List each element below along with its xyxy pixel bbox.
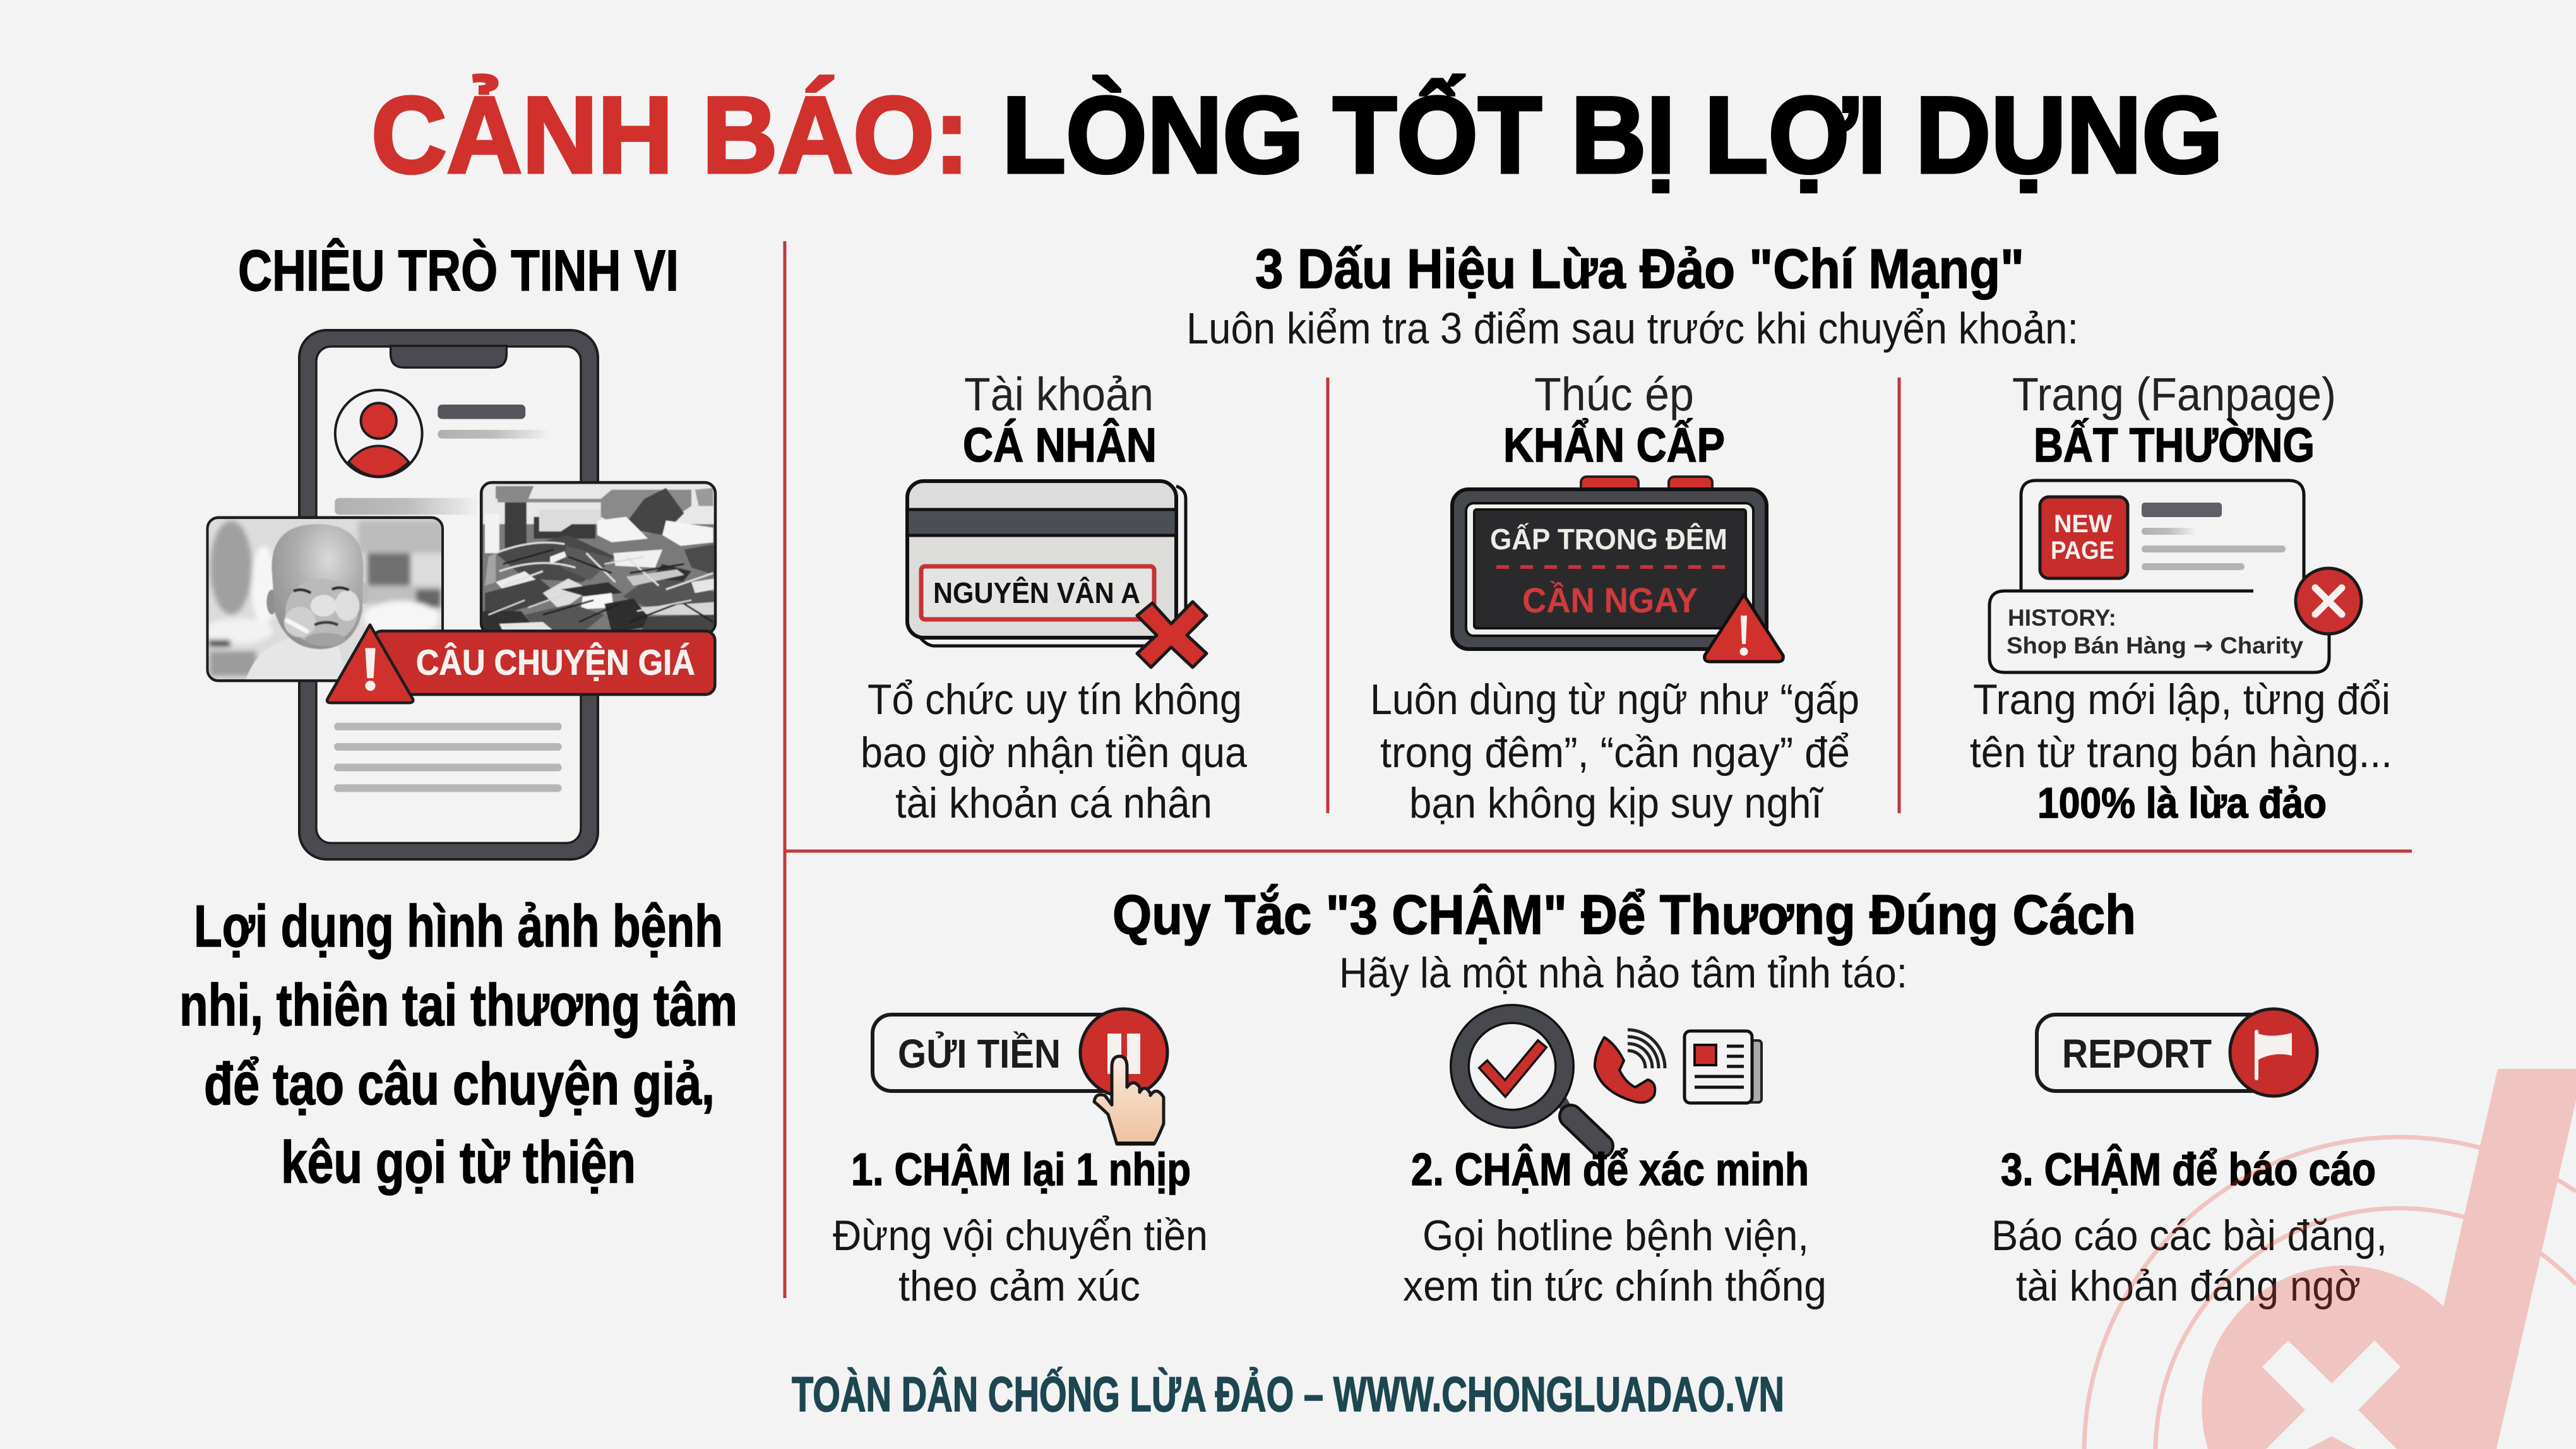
card: tài khoản cá nhân — [861, 368, 1247, 827]
text: step 2 title: 2. CHẬM để xác minh — [1411, 1144, 1809, 1195]
banner: câu chuyện giả: CÂU CHUYỆN GIÁ — [416, 641, 695, 683]
text: urgency description — [1370, 676, 1859, 827]
text: step 2 description: xem tin tức chính thống — [1403, 1262, 1827, 1310]
text: card description: tài khoản cá nhân — [895, 779, 1212, 827]
text: description of the scheme — [179, 893, 737, 1195]
icon: send money button with pause: GỬI TIỀN — [898, 1030, 1061, 1076]
text: card description: Tổ chức uy tín không — [868, 676, 1242, 724]
text: urgency description: trong đêm”, “cần ngay” để — [1380, 729, 1850, 777]
text: urgency description: Luôn dùng từ ngữ như “gấp — [1370, 676, 1859, 724]
step 3: chậm để báo cáo — [1991, 1009, 2387, 1310]
section: 3 dấu hiệu lừa đảo — [861, 237, 2392, 827]
text: card description — [861, 676, 1247, 827]
icon: fanpage history: PAGE — [2051, 537, 2114, 564]
text: step 2 description: Gọi hotline bệnh viện, — [1422, 1212, 1809, 1260]
text: step 1 title: 1. CHẬM lại 1 nhịp — [851, 1144, 1191, 1195]
text: step 3 description — [1991, 1212, 2387, 1310]
icon: fanpage history — [1989, 480, 2361, 672]
card: tài khoản cá nhân: CÁ NHÂN — [963, 418, 1157, 472]
heading: quy tắc 3 chậm: Quy Tắc "3 CHẬM" Để Thương Đúng Cách — [1112, 883, 2136, 946]
heading: 3 dấu hiệu: 3 Dấu Hiệu Lừa Đảo "Chí Mạng" — [1255, 237, 2024, 300]
card: trang bất thường: BẤT THƯỜNG — [2034, 419, 2315, 472]
icon: send money button with pause — [873, 1009, 1167, 1144]
photo: disaster debris — [481, 482, 715, 634]
text: fanpage description — [1970, 676, 2392, 827]
text: fanpage description: tên từ trang bán hàng... — [1970, 729, 2392, 777]
icon: report button with flag — [2037, 1009, 2317, 1096]
title — [371, 75, 2223, 196]
title: LÒNG TỐT BỊ LỢI DỤNG — [1002, 75, 2223, 196]
icon: bank card — [907, 481, 1207, 667]
text: step 3 description: Báo cáo các bài đăng, — [1991, 1212, 2387, 1260]
icon: bank card: NGUYÊN VÂN A — [933, 576, 1140, 609]
text: step 1 description: Đừng vội chuyển tiền — [833, 1212, 1208, 1260]
card: thúc ép khẩn cấp — [1370, 368, 1859, 827]
text: step 3 description: tài khoản đáng ngờ — [2016, 1262, 2361, 1310]
phone body — [299, 330, 598, 859]
text: description of the scheme: nhi, thiên tai thương tâm — [179, 972, 737, 1038]
text: urgency description: bạn không kịp suy nghĩ — [1409, 779, 1824, 827]
icon: fanpage history: HISTORY: — [2008, 605, 2116, 631]
heading: chiêu trò tinh vi: CHIÊU TRÒ TINH VI — [238, 237, 679, 303]
illustration: phone with fake story — [198, 330, 715, 859]
card: thúc ép khẩn cấp: KHẨN CẤP — [1503, 418, 1725, 472]
text: step 1 description: theo cảm xúc — [898, 1262, 1140, 1310]
text: step 3 title: 3. CHẬM để báo cáo — [2001, 1144, 2376, 1195]
step 2: chậm để xác minh — [1403, 1014, 1827, 1310]
text: step 1 description — [833, 1212, 1208, 1310]
text: description of the scheme: kêu gọi từ thiện — [281, 1129, 636, 1195]
icon: urgent message box — [1452, 477, 1783, 662]
card: trang bất thường — [1970, 368, 2392, 827]
text: card description: bao giờ nhận tiền qua — [861, 729, 1247, 777]
avatar — [335, 390, 422, 477]
text: step 2 description — [1403, 1212, 1827, 1310]
step 1: chậm lại 1 nhịp — [833, 1009, 1208, 1310]
subheading: Luôn kiểm tra 3 điểm sau trước khi chuyển khoản: — [1186, 304, 2078, 353]
section: quy tắc 3 chậm — [833, 883, 2387, 1310]
text: description of the scheme: để tạo câu chuyện giả, — [204, 1051, 715, 1117]
card: tài khoản cá nhân: Tài khoản — [964, 368, 1154, 420]
icon: report button with flag: REPORT — [2062, 1031, 2212, 1076]
card: thúc ép khẩn cấp: Thúc ép — [1534, 368, 1694, 420]
icon: fanpage history: NEW — [2054, 510, 2112, 538]
footer: TOÀN DÂN CHỐNG LỪA ĐẢO – WWW.CHONGLUADAO.VN — [792, 1366, 1784, 1422]
card: trang bất thường: Trang (Fanpage) — [2012, 368, 2336, 420]
banner: câu chuyện giả — [373, 631, 715, 695]
title: CẢNH BÁO: — [371, 75, 969, 196]
subheading: Hãy là một nhà hảo tâm tỉnh táo: — [1339, 949, 1907, 997]
icon: urgent message box: GẤP TRONG ĐÊM — [1490, 523, 1727, 556]
text: fanpage description: 100% là lừa đảo — [2037, 779, 2327, 827]
text: fanpage description: Trang mới lập, từng đổi — [1973, 676, 2390, 724]
icon: urgent message box: CẦN NGAY — [1522, 580, 1698, 620]
icon: magnifier, phone and news — [1460, 1014, 1762, 1146]
photo: sick child — [206, 516, 444, 682]
icon: fanpage history: Shop Bán Hàng → Charity — [2007, 632, 2303, 659]
post text lines — [334, 723, 562, 792]
profile text bars — [335, 405, 550, 515]
watermark: corner check and cross — [2084, 1069, 2576, 1449]
text: description of the scheme: Lợi dụng hình ảnh bệnh — [194, 893, 723, 959]
panel: chiêu trò tinh vi — [179, 237, 737, 1195]
icon: warning triangle — [327, 625, 413, 703]
